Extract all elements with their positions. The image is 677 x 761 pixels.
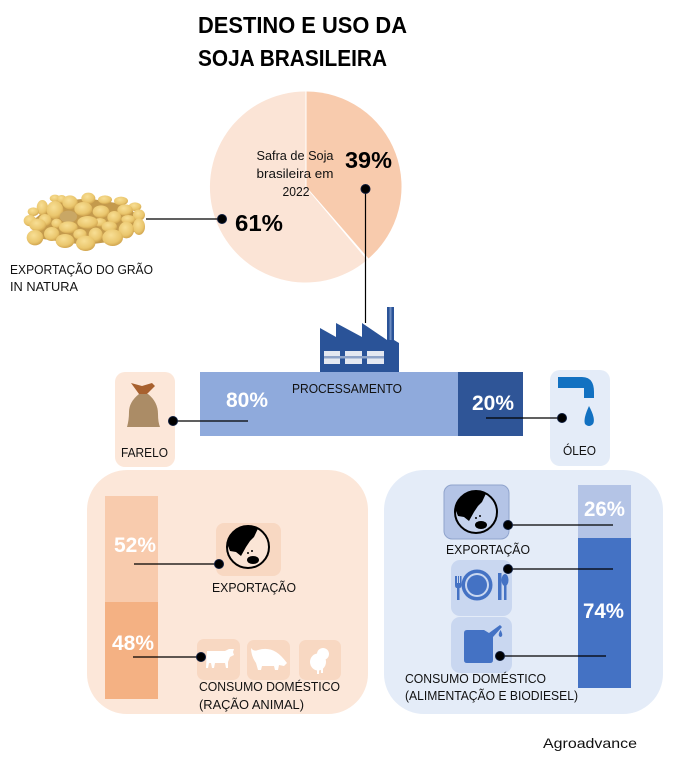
icon tile: pig [247, 640, 290, 680]
pie center label: brasileira em [256, 167, 334, 181]
card: óleo [550, 370, 610, 466]
icon tile: plate and cutlery [451, 560, 512, 616]
stacked bar: farelo [105, 496, 158, 699]
segment: 26% [578, 485, 631, 538]
value 80%: 80% [226, 389, 268, 412]
value 52%: 52% [114, 534, 156, 557]
connector: 52% to exportação [134, 560, 224, 568]
icon: tap with drop [558, 377, 594, 426]
label: consumo doméstico alimentação e biodiesel [405, 671, 578, 703]
pie chart: safra de soja [210, 91, 402, 282]
bar: processamento [200, 372, 523, 436]
label: consumo doméstico alimentação e biodiesel: CONSUMO DOMÉSTICO [405, 671, 546, 686]
connector: 74% to biodiesel [496, 652, 606, 660]
label: consumo doméstico ração animal [199, 679, 340, 712]
label: consumo doméstico alimentação e biodiesel: (ALIMENTAÇÃO E BIODIESEL) [405, 689, 578, 703]
label: óleo: ÓLEO [563, 443, 596, 458]
icon tile: chick [299, 640, 341, 680]
value 61%: 61% [235, 210, 283, 236]
connector: 20% to óleo [486, 414, 566, 422]
pie center label: 2022 [282, 185, 310, 199]
value 74%: 74% [583, 600, 624, 623]
value 48%: 48% [112, 632, 154, 655]
segment: 80% farelo [200, 372, 458, 436]
label: exportação do grão [10, 263, 153, 294]
icon tile: globe [444, 485, 509, 539]
source credit: Agroadvance [543, 735, 637, 751]
connector: 26% to exportação [504, 520, 613, 530]
card: farelo [115, 372, 175, 467]
label: exportação do grão: IN NATURA [10, 280, 79, 294]
segment: 20% óleo [458, 372, 523, 436]
segment: 74% [578, 538, 631, 688]
pie slice: exportação 61% [210, 91, 367, 282]
heading: processamento: PROCESSAMENTO [292, 382, 402, 396]
label: consumo doméstico ração animal: CONSUMO DOMÉSTICO [199, 679, 340, 694]
icon tile: fuel can [451, 617, 512, 673]
title: SOJA BRASILEIRA [198, 45, 387, 71]
value 26%: 26% [584, 498, 625, 521]
pie center label [256, 149, 334, 199]
label: exportação: EXPORTAÇÃO [212, 581, 296, 595]
label: consumo doméstico ração animal: (RAÇÃO ANIMAL) [199, 698, 304, 712]
connector: soybeans to 61% [146, 214, 226, 224]
label: exportação do grão: EXPORTAÇÃO DO GRÃO [10, 263, 153, 277]
connector: 80% to farelo [168, 416, 248, 426]
segment: 48% [105, 602, 158, 699]
segment: 52% [105, 496, 158, 602]
icon tile: cow [197, 639, 240, 680]
stacked bar: óleo [578, 485, 631, 688]
title: DESTINO E USO DA [198, 12, 407, 38]
connector: 39% to factory [361, 184, 370, 323]
pie slice: processamento 39% [306, 92, 402, 258]
icon: factory [320, 307, 399, 372]
panel: óleo destinations [384, 470, 663, 714]
value 39%: 39% [345, 147, 392, 173]
label: exportação: EXPORTAÇÃO [446, 543, 530, 557]
panel: farelo destinations [87, 470, 368, 714]
label: farelo: FARELO [121, 446, 168, 460]
connector: 74% to alimentação [504, 564, 613, 574]
connector: 48% to consumo doméstico [133, 652, 206, 662]
icon tile: globe [216, 523, 281, 576]
value 20%: 20% [472, 392, 514, 415]
pie center label: Safra de Soja [256, 149, 334, 163]
title [198, 12, 407, 71]
icon: soybeans [24, 193, 145, 251]
icon: sack [127, 383, 160, 427]
